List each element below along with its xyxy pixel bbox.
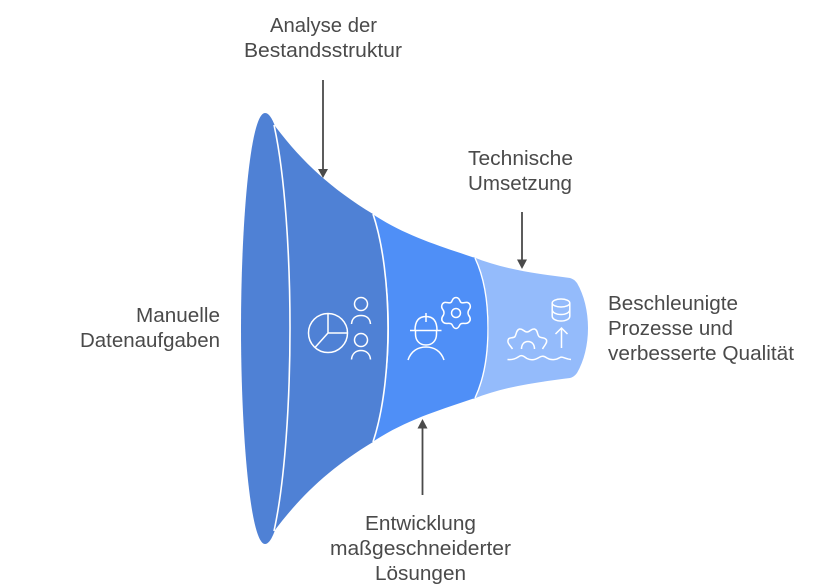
label: Beschleunigte Prozesse und verbesserte Qualität xyxy=(608,293,794,365)
label: Entwicklung maßgeschneiderter Lösungen: Lösungen xyxy=(375,563,466,585)
icon: gear xyxy=(442,298,470,328)
icon: up arrow xyxy=(556,328,568,348)
label: Technische Umsetzung: Technische xyxy=(468,148,573,170)
funnel diagram xyxy=(241,113,588,544)
label: Entwicklung maßgeschneiderter Lösungen: maßgeschneiderter xyxy=(330,538,511,560)
label: Manuelle Datenaufgaben: Manuelle xyxy=(136,305,220,327)
icon: database xyxy=(552,299,570,321)
segment: funnel mouth xyxy=(241,113,290,544)
label: Manuelle Datenaufgaben xyxy=(80,305,220,352)
arrow: down to light segment xyxy=(517,212,527,269)
segment: light blue end xyxy=(473,257,588,399)
label: Analyse der Bestandsstruktur: Analyse der xyxy=(270,15,377,37)
label: Analyse der Bestandsstruktur xyxy=(244,15,402,62)
label: Analyse der Bestandsstruktur: Bestandsstruktur xyxy=(244,40,402,62)
label: Technische Umsetzung: Umsetzung xyxy=(468,173,572,195)
label: Beschleunigte Prozesse und verbesserte Qualität: verbesserte Qualität xyxy=(608,343,794,365)
label: Entwicklung maßgeschneiderter Lösungen xyxy=(330,513,511,585)
icon: pie chart xyxy=(308,314,348,352)
segment: mid blue xyxy=(371,213,489,443)
icon: gear over waves xyxy=(508,329,571,360)
icon: two people xyxy=(352,298,370,360)
label: Beschleunigte Prozesse und verbesserte Qualität: Beschleunigte xyxy=(608,293,738,315)
label: Manuelle Datenaufgaben: Datenaufgaben xyxy=(80,330,220,352)
label: Technische Umsetzung xyxy=(468,148,573,195)
icon: engineer with hard hat xyxy=(408,313,444,360)
label: Entwicklung maßgeschneiderter Lösungen: Entwicklung xyxy=(365,513,476,535)
segment: dark blue body xyxy=(272,122,388,534)
arrow: up to mid segment xyxy=(418,419,428,495)
arrow: down to funnel top xyxy=(318,80,328,178)
label: Beschleunigte Prozesse und verbesserte Qualität: Prozesse und xyxy=(608,318,733,340)
